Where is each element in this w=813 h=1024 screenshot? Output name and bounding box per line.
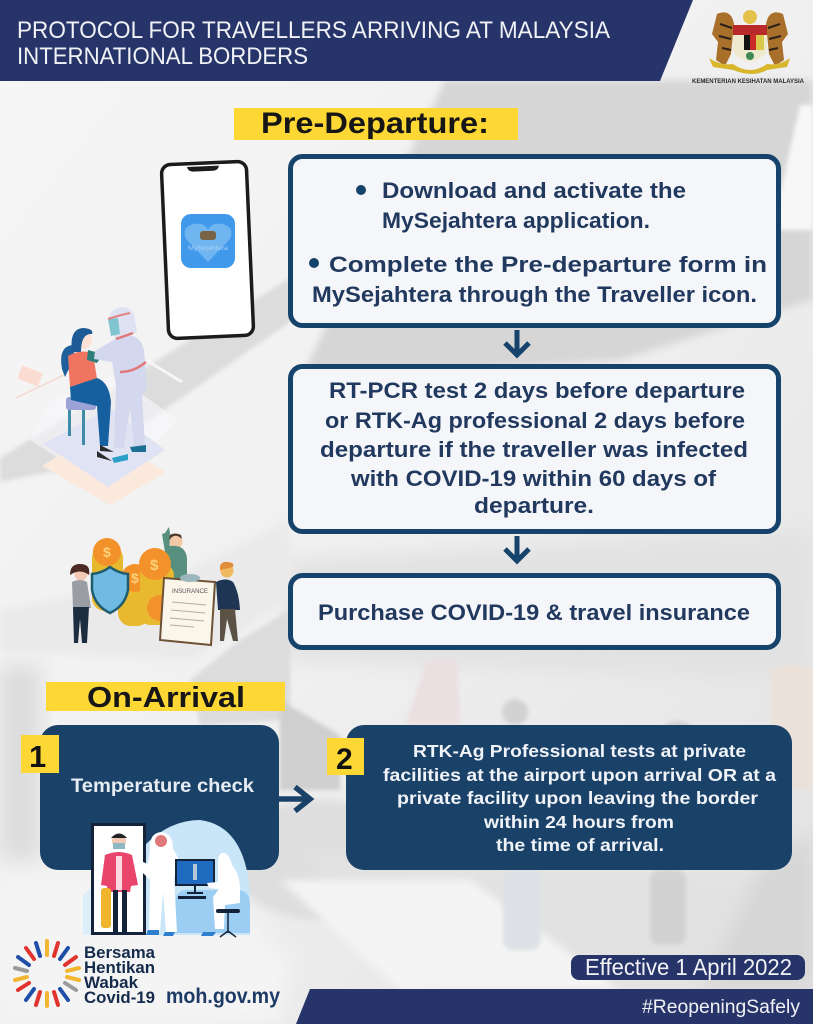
panel: MySejahtera steps: Download and activate the — [382, 178, 686, 203]
arrow — [505, 330, 529, 355]
logo: Bersama Hentikan Wabak Covid-19 — [15, 941, 156, 1007]
logo: Bersama Hentikan Wabak Covid-19: Covid-19 — [84, 988, 155, 1007]
heading: On-Arrival: On-Arrival — [87, 682, 245, 714]
illustration: insurance: $ — [103, 544, 111, 560]
panel: test requirements — [290, 366, 778, 532]
panel: step 2 RTK-Ag test — [327, 725, 792, 870]
illustration: insurance — [70, 527, 240, 645]
step number 1: 1 — [29, 739, 46, 774]
panel: test requirements: departure. — [474, 493, 594, 518]
heading: Pre-Departure: Pre-Departure: — [261, 107, 489, 140]
step text: facilities at the airport upon arrival OR at a — [383, 765, 776, 785]
step number 2 — [327, 738, 364, 776]
step number 1 — [21, 735, 59, 774]
illustration: insurance: $ — [131, 570, 139, 586]
icon: phone with MySejahtera app — [161, 161, 254, 339]
footer banner — [296, 989, 813, 1024]
arrow — [279, 787, 310, 811]
logo: Bersama Hentikan Wabak Covid-19: Wabak — [84, 973, 139, 992]
panel: MySejahtera steps — [290, 156, 778, 326]
website: moh.gov.my — [166, 984, 280, 1008]
illustration: insurance: $ — [150, 557, 159, 574]
panel: step 1 temperature check — [21, 725, 279, 870]
panel: insurance — [290, 576, 778, 648]
heading: On-Arrival — [46, 682, 285, 714]
logo: Ministry of Health crest: KEMENTERIAN KESIHATAN MALAYSIA — [692, 78, 804, 85]
step text: private facility upon leaving the border — [397, 788, 758, 808]
step text: within 24 hours from — [483, 812, 674, 832]
panel: test requirements: RT-PCR test 2 days before departure — [329, 378, 745, 403]
effective date badge: Effective 1 April 2022 — [585, 954, 792, 980]
arrow — [505, 536, 529, 561]
hashtag: #ReopeningSafely — [642, 997, 800, 1018]
illustration: border screening — [83, 820, 250, 937]
panel: MySejahtera steps: MySejahtera application. — [382, 208, 650, 233]
title: PROTOCOL FOR TRAVELLERS ARRIVING AT MALAYSIA — [17, 17, 610, 44]
illustration: insurance: INSURANCE — [172, 588, 209, 595]
illustration: swab test — [16, 307, 182, 505]
panel: MySejahtera steps: Complete the Pre-departure form in — [329, 252, 767, 277]
logo: Bersama Hentikan Wabak Covid-19: Bersama — [84, 943, 156, 962]
panel: test requirements: with COVID-19 within 60 days of — [350, 466, 717, 491]
header banner — [0, 0, 693, 81]
step label: Temperature check — [71, 776, 254, 797]
logo: Bersama Hentikan Wabak Covid-19: Hentikan — [84, 958, 155, 977]
step number 2: 2 — [336, 743, 353, 776]
step text — [383, 741, 776, 855]
title: INTERNATIONAL BORDERS — [17, 43, 308, 70]
panel: insurance: Purchase COVID-19 & travel insurance — [318, 600, 750, 625]
title — [17, 17, 610, 70]
panel: test requirements: departure if the traveller was infected — [320, 437, 748, 462]
icon: phone with MySejahtera app: MySejahtera — [188, 246, 229, 252]
logo: Ministry of Health crest — [692, 10, 804, 85]
panel: test requirements: or RTK-Ag professional 2 days before — [325, 408, 745, 433]
step text: RTK-Ag Professional tests at private — [413, 741, 746, 761]
panel: MySejahtera steps: MySejahtera through the Traveller icon. — [312, 282, 757, 307]
step text: the time of arrival. — [496, 835, 664, 855]
